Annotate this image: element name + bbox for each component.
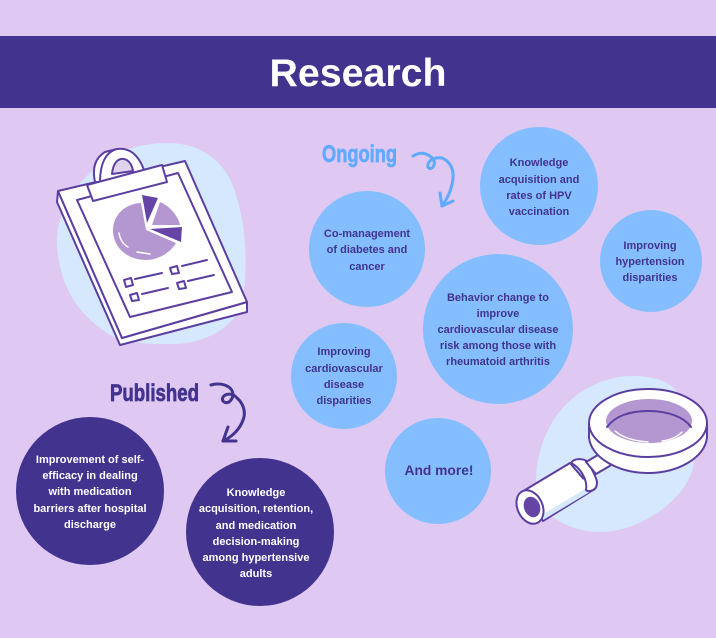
icon: clipboard with pie chart xyxy=(57,143,247,345)
circle: Knowledge acquisition, retention: among hypertensive xyxy=(203,552,309,564)
circle: Co-management of diabetes and cancer: Co-management xyxy=(324,228,410,240)
circle: Knowledge acquisition, retention: adults xyxy=(240,568,272,580)
circle: Behavior change: cardiovascular disease xyxy=(437,324,559,336)
circle: Improving hypertension disparities: Improving xyxy=(623,240,677,252)
circle: Behavior change xyxy=(423,254,573,404)
circle: Behavior change: rheumatoid arthritis xyxy=(446,356,550,368)
circle: Improvement of self-efficacy: with medication xyxy=(47,486,132,498)
heading: Published: Published xyxy=(110,380,199,407)
circle: Improvement of self-efficacy: efficacy in dealing xyxy=(42,470,138,482)
circle: Knowledge acquisition and rates of HPV vaccination xyxy=(480,127,598,245)
circle: Improving cardiovascular disease disparities: disease xyxy=(324,379,364,391)
circle: Knowledge acquisition, retention: Knowledge xyxy=(227,487,285,499)
circle: Improving cardiovascular disease disparities: disparities xyxy=(316,395,372,407)
circle: Improving cardiovascular disease disparities: cardiovascular xyxy=(305,363,384,375)
circle: Knowledge acquisition and rates of HPV vaccination: rates of HPV xyxy=(506,190,572,202)
circle: Knowledge acquisition, retention: decision-making xyxy=(213,536,299,548)
circle: Co-management of diabetes and cancer: cancer xyxy=(349,261,385,273)
icon: magnifying glass xyxy=(511,376,707,532)
circle: Knowledge acquisition, retention: and medication xyxy=(216,520,297,532)
circle: Improvement of self-efficacy: barriers after hospital xyxy=(33,503,147,515)
circle: Co-management of diabetes and cancer xyxy=(309,191,425,307)
circle: Behavior change: improve xyxy=(477,308,519,320)
arrow: ongoing xyxy=(413,153,453,206)
circle: Knowledge acquisition and rates of HPV vaccination: acquisition and xyxy=(499,174,579,186)
circle: Co-management of diabetes and cancer: of diabetes and xyxy=(327,244,407,256)
circle: Improvement of self-efficacy: discharge xyxy=(64,519,116,531)
circle: Knowledge acquisition, retention xyxy=(186,458,334,606)
circle: Behavior change: risk among those with xyxy=(440,340,556,352)
circle: Improving hypertension disparities: disparities xyxy=(622,272,678,284)
title: Research xyxy=(270,52,446,95)
arrow: published xyxy=(211,384,244,441)
circle: Behavior change: Behavior change to xyxy=(447,292,549,304)
circle: Knowledge acquisition and rates of HPV vaccination: Knowledge xyxy=(510,157,568,169)
heading: Ongoing: Ongoing xyxy=(322,141,397,168)
heading: Ongoing xyxy=(322,141,453,206)
circle: Improvement of self-efficacy: Improvement of self- xyxy=(36,454,144,466)
circle: Knowledge acquisition and rates of HPV vaccination: vaccination xyxy=(509,206,570,218)
heading: Published xyxy=(110,380,244,441)
circle: Improving hypertension disparities xyxy=(600,210,702,312)
circle: Improvement of self-efficacy xyxy=(16,417,164,565)
circle: And more: And more! xyxy=(404,463,474,478)
circle: Improving cardiovascular disease disparities: Improving xyxy=(317,346,371,358)
header banner xyxy=(0,36,716,108)
circle: Knowledge acquisition, retention: acquisition, retention, xyxy=(199,503,313,515)
circle: Improving cardiovascular disease disparities xyxy=(291,323,397,429)
circle: And more xyxy=(385,418,491,524)
circle: Improving hypertension disparities: hypertension xyxy=(615,256,685,268)
